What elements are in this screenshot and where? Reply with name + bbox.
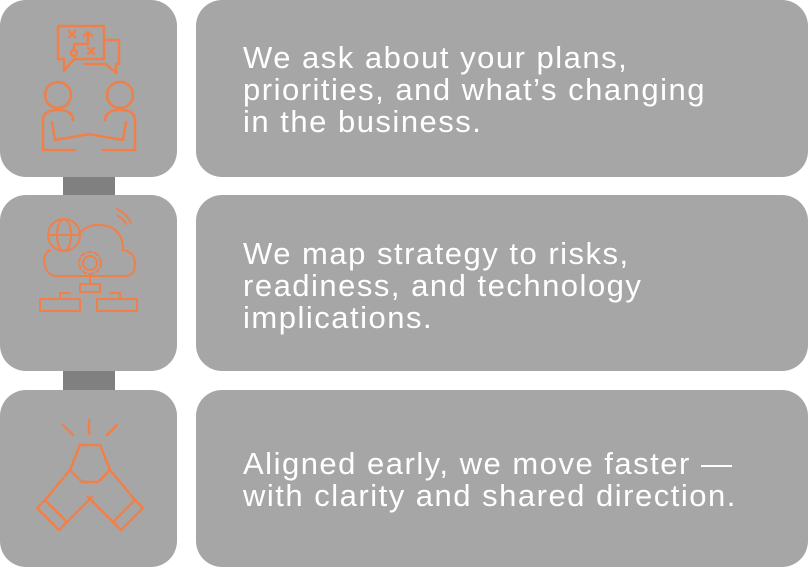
text block 2: We map strategy to risks, bbox=[243, 236, 630, 271]
icon: cloud network bbox=[39, 208, 138, 312]
text block 3: with clarity and shared direction. bbox=[243, 478, 737, 513]
text block 1: in the business. bbox=[243, 104, 482, 139]
icon: two people meeting bbox=[42, 24, 136, 152]
text block 2: implications. bbox=[243, 300, 433, 335]
text block 1: We ask about your plans, bbox=[243, 40, 628, 75]
text block 2 bbox=[243, 236, 642, 335]
text block 3 bbox=[243, 446, 737, 513]
panel: icon box 1 bbox=[0, 0, 177, 177]
connector 2 bbox=[63, 370, 115, 390]
panel: icon box 3 bbox=[0, 390, 177, 567]
text block 1: priorities, and what’s changing bbox=[243, 72, 706, 107]
panel: icon box 2 bbox=[0, 195, 177, 371]
text block 2: readiness, and technology bbox=[243, 268, 642, 303]
icon: clasped hands bbox=[36, 418, 144, 532]
text block 1 bbox=[243, 40, 706, 139]
panel: text 3 bbox=[196, 390, 808, 567]
panel: text 1 bbox=[196, 0, 808, 177]
panel: text 2 bbox=[196, 195, 808, 371]
text block 3: Aligned early, we move faster — bbox=[243, 446, 733, 481]
connector 1 bbox=[63, 176, 115, 196]
